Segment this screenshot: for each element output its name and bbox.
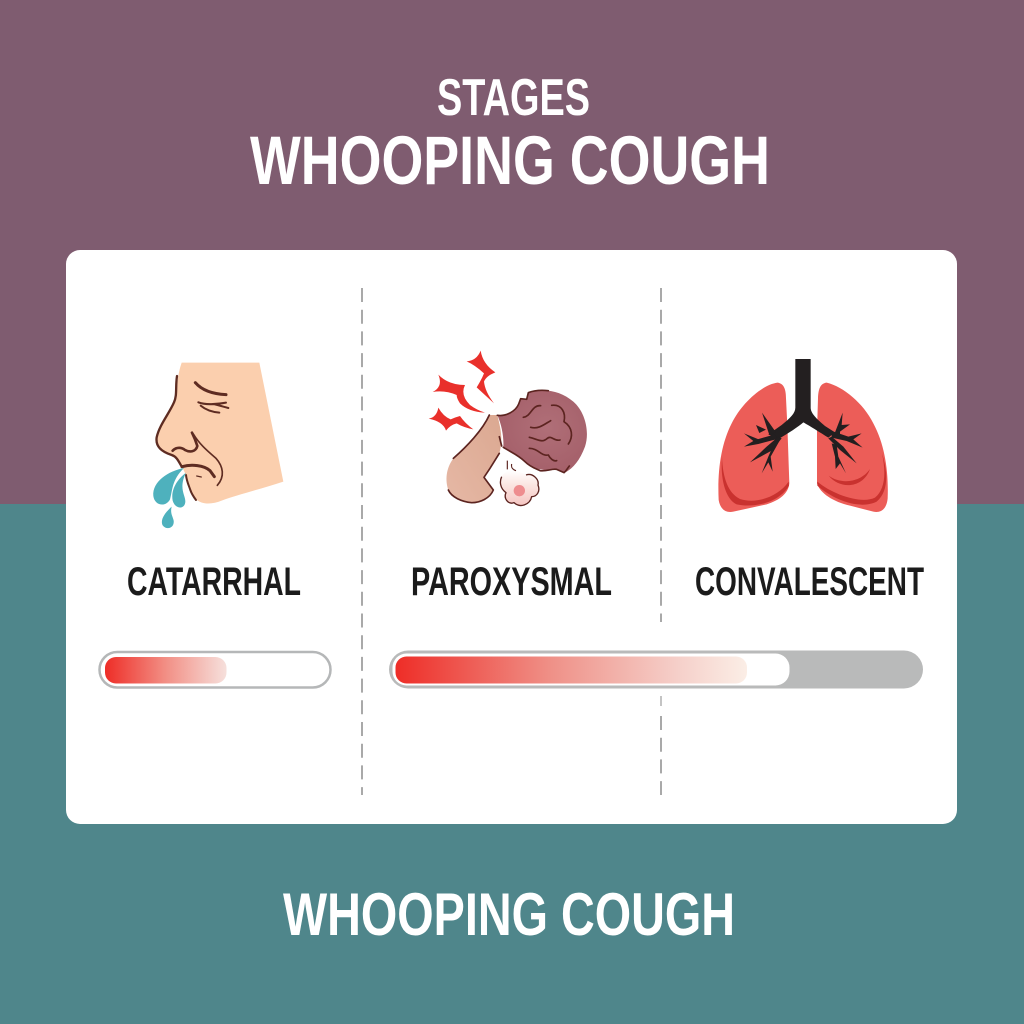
icon detail: lung mass [497,390,587,473]
divider: right dashed line [660,288,662,795]
background: upper plum band [0,0,1024,504]
icon detail: lung folds [722,453,886,505]
title: whooping cough: WHOOPING COUGH [250,122,770,199]
heading: stages: STAGES [437,69,590,127]
icon: coughing chest with pain bursts [429,351,587,505]
icon detail: left lung [718,383,789,512]
icon detail: trachea and bronchi [744,359,863,473]
icon detail: bursts [429,351,495,431]
progress bar: catarrhal [100,652,330,688]
icon detail: phlegm splat [500,471,539,505]
panel: stages card [66,250,957,824]
icon detail: droplets [153,468,186,528]
divider: left dashed line [361,288,363,795]
icon detail: throat [447,415,501,503]
label: catarrhal: CATARRHAL [127,560,301,604]
progress bar: paroxysmal and convalescent [389,650,923,688]
background: lower teal band [0,504,1024,1024]
icon: runny nose face [153,363,283,528]
footer title: whooping cough: WHOOPING COUGH [283,881,735,948]
icon detail: right lung [817,383,888,512]
label: convalescent: CONVALESCENT [695,560,924,604]
label: paroxysmal: PAROXYSMAL [411,560,612,604]
icon: lungs [718,359,888,512]
